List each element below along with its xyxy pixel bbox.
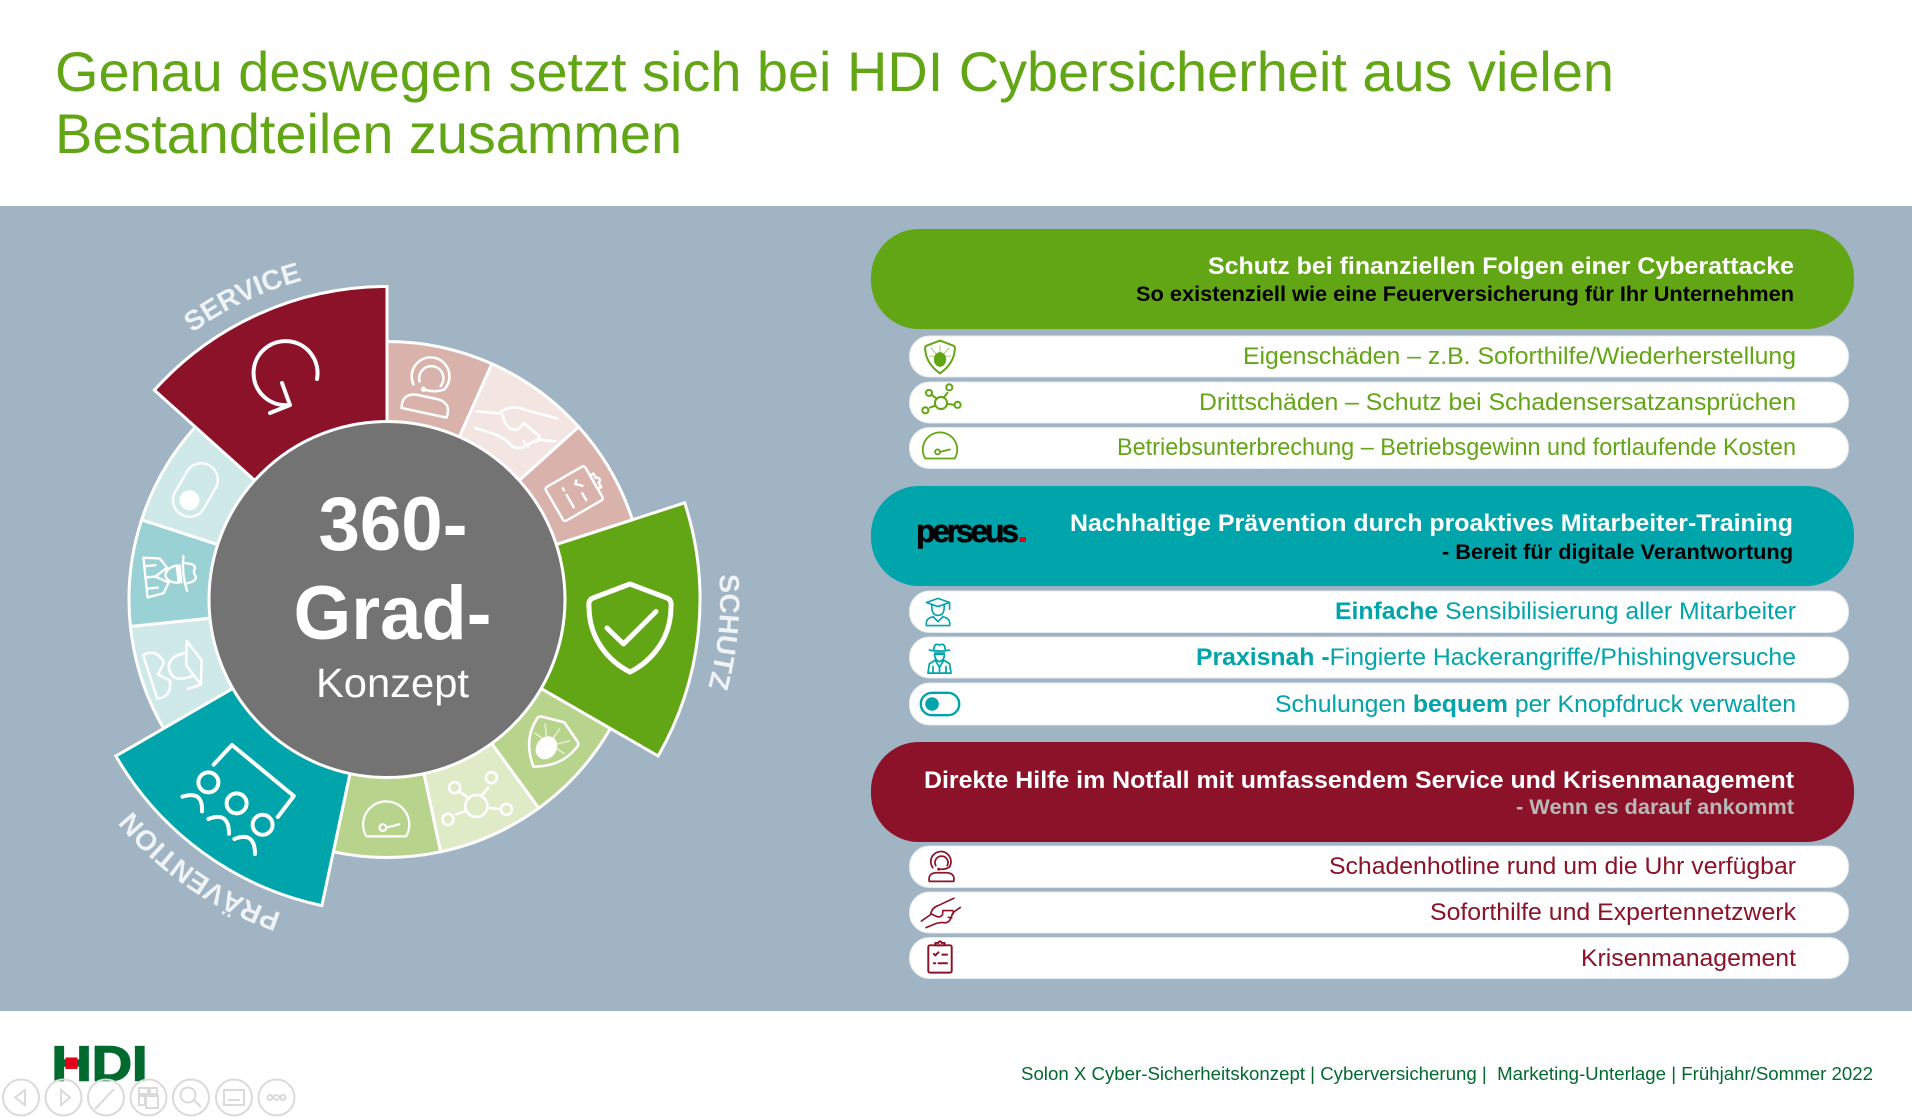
schutz wedge	[387, 503, 700, 756]
center text: Konzept	[316, 660, 470, 706]
praevention small segments	[129, 427, 387, 728]
row: schadenhotline	[910, 846, 1848, 888]
playback controls	[3, 1080, 294, 1116]
header pill green	[871, 229, 1854, 329]
icon: wheel hotline	[401, 353, 458, 418]
title: Bestandteilen zusammen	[55, 102, 682, 165]
header text teal: Nachhaltige Prävention durch proaktives Mitarbeiter-Training	[1070, 510, 1793, 537]
icon: wheel handshake	[474, 404, 558, 451]
row: praxisnah: Praxisnah -Fingierte Hackerangriffe/Phishingversuche	[1196, 644, 1796, 671]
label: schutz: SCHUTZ	[708, 575, 740, 690]
row: soforthilfe	[910, 892, 1848, 934]
icon: wheel graduate	[143, 638, 209, 699]
row: schulungen: Schulungen bequem per Knopfdruck verwalten	[1275, 691, 1796, 718]
row: soforthilfe: Soforthilfe und Expertennetzwerk	[1430, 899, 1797, 926]
logo: perseus: perseus	[916, 513, 1019, 549]
row: sensibilisierung: Einfache Sensibilisierung aller Mitarbeiter	[1335, 598, 1796, 625]
header text crimson: - Wenn es darauf ankommt	[1516, 795, 1794, 819]
header text teal: - Bereit für digitale Verantwortung	[1442, 540, 1793, 564]
center circle	[209, 422, 565, 778]
row: krisenmanagement	[910, 938, 1848, 978]
center text: Grad-	[294, 571, 492, 656]
background band	[0, 206, 1912, 1011]
row: praxisnah	[910, 637, 1848, 678]
center text: 360-	[318, 482, 468, 567]
row: betriebsunterbrechung: Betriebsunterbrechung – Betriebsgewinn und fortlaufende Kosten	[1117, 434, 1796, 461]
row: drittschaeden	[910, 382, 1848, 423]
header pill crimson	[871, 742, 1854, 842]
header text crimson	[924, 767, 1794, 819]
row: eigenschaeden: Eigenschäden – z.B. Soforthilfe/Wiederherstellung	[1243, 343, 1796, 370]
icon: wheel clipboard	[545, 462, 609, 522]
header text green: So existenziell wie eine Feuerversicherung für Ihr Unternehmen	[1136, 282, 1794, 306]
header text green: Schutz bei finanziellen Folgen einer Cyberattacke	[1208, 253, 1794, 280]
row: sensibilisierung	[910, 591, 1848, 632]
label: service: SERVICE	[184, 262, 302, 330]
icon: wheel network	[442, 772, 512, 825]
row: krisenmanagement: Krisenmanagement	[1581, 945, 1796, 972]
footer text: Solon X Cyber-Sicherheitskonzept | Cyberversicherung | Marketing-Unterlage | Frühjahr/Sommer 2022	[1021, 1063, 1873, 1084]
row: schadenhotline: Schadenhotline rund um die Uhr verfügbar	[1329, 853, 1796, 880]
360-degree wheel	[114, 262, 740, 931]
service wedge	[154, 286, 387, 600]
title	[55, 40, 1614, 165]
panel: schutz	[871, 229, 1854, 468]
center text	[294, 482, 492, 706]
praevention wedge	[116, 600, 387, 906]
title: Genau deswegen setzt sich bei HDI Cybersicherheit aus vielen	[55, 40, 1614, 103]
row: betriebsunterbrechung	[910, 428, 1848, 468]
row: schulungen	[910, 683, 1848, 725]
icon: shield check	[589, 584, 671, 672]
icon: refresh arrow	[254, 341, 318, 413]
icon: wheel toggle	[167, 457, 224, 523]
header text crimson: Direkte Hilfe im Notfall mit umfassendem Service und Krisenmanagement	[924, 767, 1794, 794]
header text green	[1136, 253, 1794, 306]
row: eigenschaeden	[910, 336, 1848, 377]
panel: praevention	[871, 486, 1854, 725]
row: drittschaeden: Drittschäden – Schutz bei Schadensersatzansprüchen	[1199, 389, 1796, 416]
service small segments	[387, 342, 632, 600]
panel: service	[871, 742, 1854, 978]
icon: wheel gauge	[363, 801, 409, 836]
logo: HDI: HDI	[52, 1038, 148, 1092]
icon: wheel bug shield	[513, 708, 584, 781]
icon: wheel hacker	[143, 552, 197, 597]
label: praevention: PRÄVENTION	[118, 812, 280, 931]
icon: group training	[182, 745, 294, 854]
header text teal	[1070, 510, 1793, 564]
schutz small segments	[333, 600, 610, 857]
header pill teal	[871, 486, 1854, 586]
